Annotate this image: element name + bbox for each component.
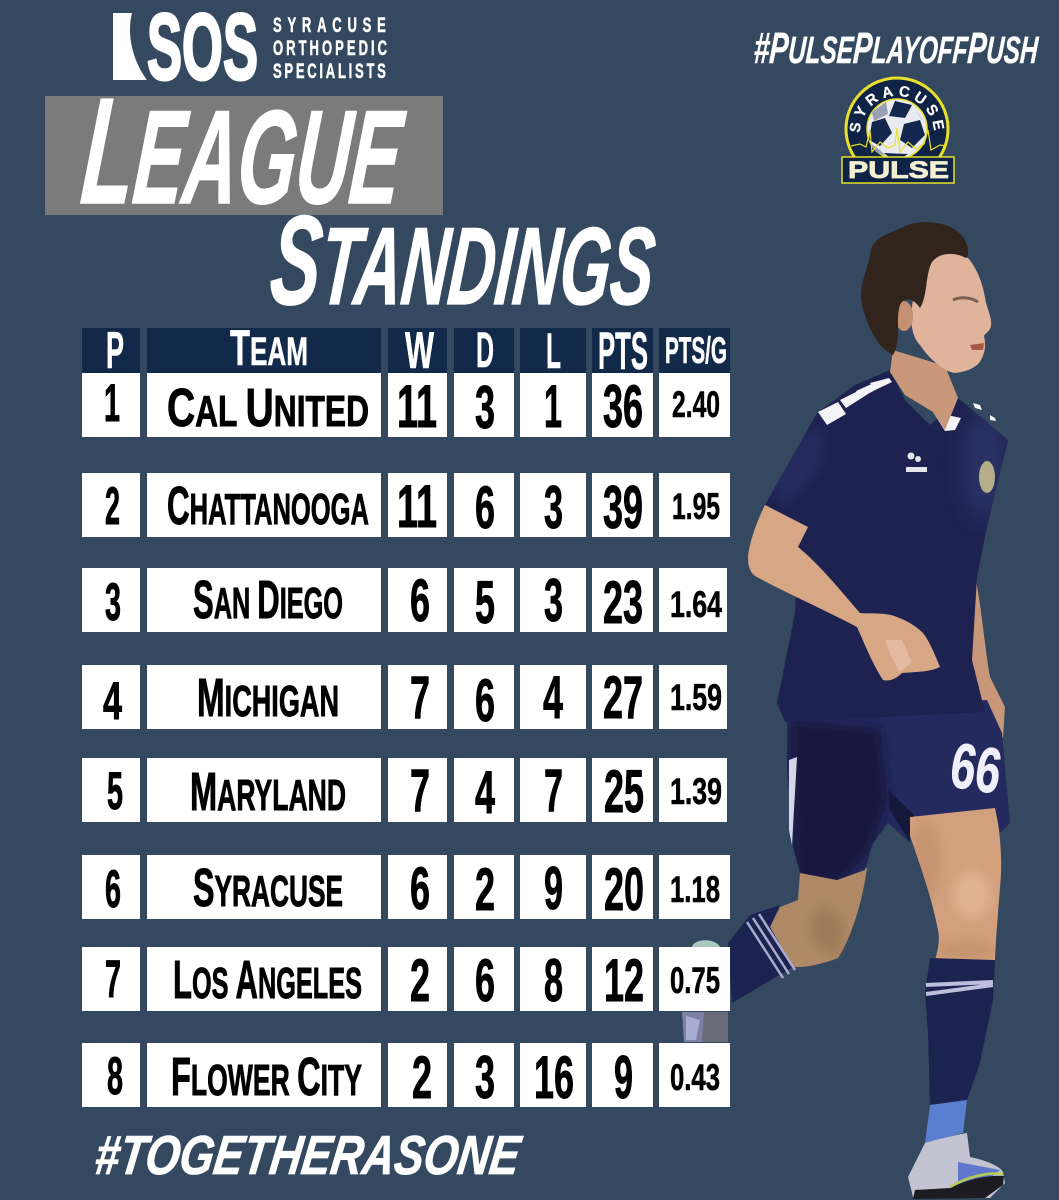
back boot bbox=[682, 940, 728, 1042]
row 6: Syracuse bbox=[82, 855, 730, 923]
row 6: Syracuse: 20 bbox=[604, 856, 644, 923]
row 1: Cal United: CAL UNITED bbox=[167, 378, 369, 438]
logo text lines: SYRACUSE bbox=[273, 13, 386, 37]
hair bbox=[861, 222, 968, 355]
back sock bbox=[728, 905, 795, 1003]
undershirt collar bbox=[933, 412, 961, 431]
row 8: Flower City: 8 bbox=[107, 1047, 123, 1106]
row 7: Los Angeles: 8 bbox=[544, 947, 563, 1014]
row 3: San Diego: 23 bbox=[603, 569, 643, 636]
row 3: San Diego: 3 bbox=[544, 567, 563, 634]
row 6: Syracuse: 1.18 bbox=[670, 869, 720, 910]
row 1: Cal United: 36 bbox=[603, 373, 643, 440]
row 8: Flower City: 0.43 bbox=[670, 1057, 720, 1098]
row 3: San Diego: 6 bbox=[410, 567, 430, 634]
logo text lines: SPECIALISTS bbox=[273, 59, 386, 83]
club badge bbox=[979, 461, 995, 493]
row 2: Chattanooga: 6 bbox=[475, 474, 495, 541]
ECG line bbox=[851, 128, 946, 152]
row 3: San Diego: 5 bbox=[475, 569, 495, 636]
row 3: San Diego: 1.64 bbox=[670, 584, 722, 625]
row 2: Chattanooga: 3 bbox=[544, 474, 563, 541]
row 6: Syracuse: SYRACUSE bbox=[193, 858, 343, 918]
front boot bbox=[908, 1133, 1005, 1199]
table header: PTS/G bbox=[665, 330, 727, 371]
eyebrow bbox=[953, 298, 978, 302]
shoulder chevrons bbox=[818, 378, 892, 425]
row 2: Chattanooga: 2 bbox=[105, 477, 120, 536]
ear bbox=[895, 301, 913, 331]
row 4: Michigan: 6 bbox=[475, 667, 495, 734]
row 4: Michigan: 1.59 bbox=[670, 677, 722, 718]
row 6: Syracuse: 9 bbox=[544, 855, 563, 922]
logo text lines: ORTHOPEDIC bbox=[273, 36, 387, 60]
row 4: Michigan: 4 bbox=[103, 672, 122, 731]
row 1: Cal United: 1 bbox=[104, 374, 120, 433]
row 4: Michigan: 27 bbox=[603, 664, 643, 731]
title word: Standings: STANDINGS bbox=[266, 189, 661, 331]
row 5: Maryland bbox=[82, 757, 727, 826]
row 3: San Diego bbox=[82, 567, 727, 636]
table header: P bbox=[106, 322, 124, 380]
title word: League: LEAGUE bbox=[76, 67, 411, 236]
shorts number: 66 bbox=[946, 729, 1006, 808]
row 6: Syracuse: 2 bbox=[475, 856, 495, 923]
row 1: Cal United: 2.40 bbox=[672, 384, 720, 425]
table header: D bbox=[476, 322, 494, 378]
near arm bbox=[748, 505, 940, 681]
shorts bbox=[787, 700, 1010, 885]
brand logo bbox=[906, 452, 927, 472]
front sock bbox=[925, 958, 995, 1105]
row 4: Michigan: 7 bbox=[410, 664, 430, 731]
row 1: Cal United bbox=[82, 373, 730, 441]
row 7: Los Angeles: 7 bbox=[105, 950, 121, 1009]
logo: Syracuse Orthopedic Specialists bbox=[113, 0, 387, 99]
row 2: Chattanooga: 11 bbox=[397, 473, 437, 540]
standings table bbox=[82, 320, 730, 1111]
far arm bbox=[970, 575, 1005, 738]
row 3: San Diego: 3 bbox=[105, 573, 121, 632]
icon: SOS mark bbox=[113, 13, 147, 80]
table header: TEAM bbox=[230, 320, 308, 376]
player photo illustration bbox=[682, 222, 1010, 1199]
row 1: Cal United: 3 bbox=[475, 374, 495, 441]
row 1: Cal United: 11 bbox=[397, 373, 437, 440]
row 7: Los Angeles bbox=[82, 947, 730, 1014]
logo: Syracuse Pulse crest bbox=[841, 76, 955, 184]
PULSE plaque: PULSE bbox=[848, 157, 949, 184]
crest arc text: SYRACUSE bbox=[850, 86, 944, 132]
row 7: Los Angeles: 12 bbox=[604, 947, 644, 1014]
jersey bbox=[763, 370, 1008, 722]
row 2: Chattanooga bbox=[82, 473, 730, 541]
row 7: Los Angeles: 2 bbox=[410, 947, 430, 1014]
row 6: Syracuse: 6 bbox=[105, 860, 121, 919]
row 4: Michigan bbox=[82, 664, 727, 734]
table header bbox=[82, 320, 730, 381]
hashtag: Together As One: #TOGETHERASONE bbox=[91, 1124, 526, 1186]
row 5: Maryland: 7 bbox=[410, 757, 430, 824]
row 5: Maryland: 25 bbox=[604, 758, 644, 825]
row 7: Los Angeles: LOS ANGELES bbox=[173, 950, 362, 1010]
logo text lines bbox=[273, 13, 387, 83]
neck bbox=[890, 350, 958, 430]
row 4: Michigan: MICHIGAN bbox=[197, 668, 339, 728]
row 5: Maryland: 1.39 bbox=[670, 771, 722, 812]
title panel: League bbox=[45, 67, 443, 236]
back leg skin bbox=[770, 868, 867, 967]
table header: L bbox=[546, 323, 561, 379]
row 2: Chattanooga: 1.95 bbox=[672, 486, 720, 527]
row 5: Maryland: 7 bbox=[544, 757, 563, 824]
row 6: Syracuse: 6 bbox=[410, 855, 430, 922]
row 5: Maryland: 4 bbox=[475, 759, 495, 826]
row 7: Los Angeles: 6 bbox=[475, 947, 495, 1014]
blue undersock bbox=[925, 1100, 967, 1143]
row 8: Flower City: FLOWER CITY bbox=[171, 1047, 362, 1107]
row 7: Los Angeles: 0.75 bbox=[670, 960, 720, 1001]
mouth bbox=[970, 343, 984, 350]
soccer ball bbox=[867, 99, 927, 159]
row 4: Michigan: 4 bbox=[543, 664, 563, 731]
row 8: Flower City: 16 bbox=[534, 1044, 574, 1111]
row 5: Maryland: MARYLAND bbox=[190, 762, 346, 822]
hand shading bbox=[885, 640, 912, 672]
hashtag: PulsePlayoffPush: #PULSEPLAYOFFPUSH bbox=[752, 24, 1041, 73]
table header: W bbox=[405, 322, 435, 380]
row 8: Flower City: 3 bbox=[475, 1044, 495, 1111]
row 2: Chattanooga: CHATTANOOGA bbox=[167, 476, 369, 536]
row 5: Maryland: 5 bbox=[107, 762, 123, 821]
row 8: Flower City bbox=[82, 1043, 730, 1111]
row 3: San Diego: SAN DIEGO bbox=[193, 570, 343, 630]
front leg bbox=[903, 806, 1001, 960]
row 8: Flower City: 9 bbox=[614, 1044, 633, 1111]
face bbox=[911, 253, 991, 373]
row 2: Chattanooga: 39 bbox=[603, 474, 643, 541]
row 8: Flower City: 2 bbox=[412, 1044, 432, 1111]
table header: PTS bbox=[598, 322, 648, 381]
row 1: Cal United: 1 bbox=[544, 373, 562, 440]
